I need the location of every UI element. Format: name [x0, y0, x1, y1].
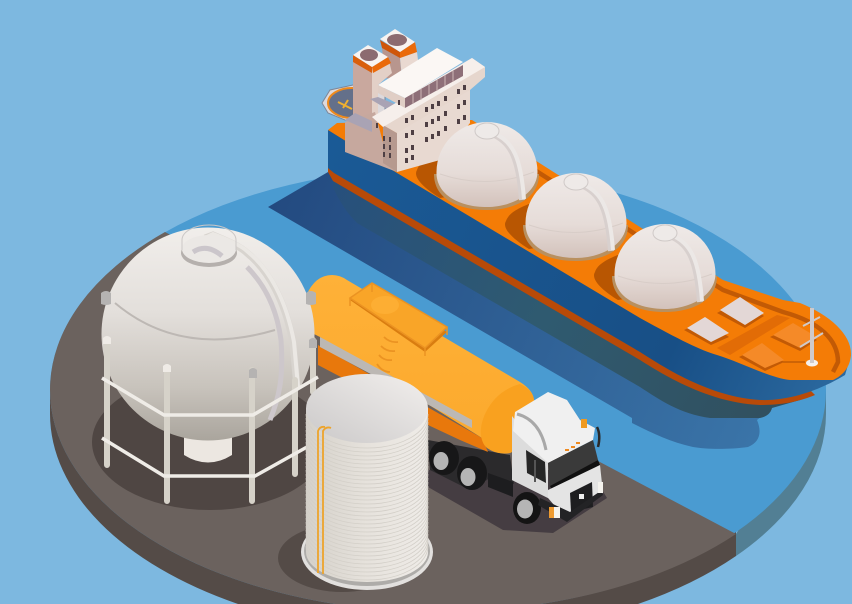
gas domes: [434, 122, 717, 312]
beacon and roof lights: [581, 419, 587, 428]
water surface: [50, 168, 826, 604]
tank top: [306, 374, 428, 443]
chassis: [428, 440, 514, 490]
truck ground shadow: [428, 470, 607, 533]
cab roof: [512, 392, 595, 463]
tank base ring: [301, 514, 433, 590]
mirror: [597, 427, 599, 447]
pipe: [205, 235, 297, 387]
windscreen: [548, 440, 598, 487]
seam: [115, 303, 275, 339]
water side edge: [736, 390, 826, 556]
helipad: [322, 85, 385, 122]
pipe shadow: [247, 267, 282, 420]
silver stripe: [320, 337, 472, 428]
orange ladder: [318, 427, 331, 574]
ship: [322, 29, 851, 418]
bumper: [538, 490, 603, 522]
windows: [405, 85, 466, 153]
land side edge: [50, 390, 736, 604]
wheels: [429, 441, 541, 524]
cab side panel: [512, 416, 548, 498]
lower block: [345, 112, 397, 172]
cab side lower: [512, 430, 548, 498]
post caps: [101, 291, 317, 378]
tanker lower band: [318, 345, 488, 452]
platform disc: [50, 168, 826, 604]
hull reflection: [333, 180, 800, 418]
tanker truck: [306, 275, 607, 533]
dome 2: [523, 173, 628, 261]
dome 3: [612, 224, 717, 312]
cab front: [548, 465, 603, 520]
funnel front: [353, 45, 392, 125]
front face: [383, 78, 470, 172]
tanker body: [306, 275, 534, 453]
tank end cap: [481, 384, 534, 453]
deck: [328, 120, 851, 380]
side window: [526, 450, 546, 483]
grille: [570, 482, 593, 512]
frame rails: [102, 377, 318, 476]
headlights: [549, 507, 560, 518]
land surface: [50, 232, 736, 604]
side dark face: [383, 125, 397, 172]
tank ribs: [306, 414, 428, 580]
mast: [800, 308, 823, 366]
grey stair panels: [345, 97, 404, 132]
cylinder tank shadow: [278, 524, 406, 592]
bow deck details: [684, 297, 823, 371]
tank body: [306, 408, 428, 582]
dome 1: [434, 122, 539, 210]
sphere base cylinder: [184, 430, 232, 462]
funnel back: [380, 29, 418, 80]
ship shadow on water: [268, 172, 772, 449]
tank wells: [416, 151, 668, 300]
frame posts: [107, 340, 313, 501]
cab: [512, 392, 603, 522]
top hatch: [181, 225, 237, 267]
storage sphere shadow: [92, 374, 328, 510]
storage sphere: [101, 225, 318, 501]
deck inner channel: [478, 134, 838, 372]
wing deck: [372, 58, 485, 133]
superstructure: [345, 29, 485, 172]
hull side: [328, 130, 851, 400]
platform on tank: [350, 283, 447, 356]
red waterline: [328, 165, 815, 405]
cylindrical tank: [301, 374, 433, 590]
tank ladder: [377, 337, 398, 372]
roof block: [378, 85, 405, 108]
sphere: [102, 228, 314, 440]
